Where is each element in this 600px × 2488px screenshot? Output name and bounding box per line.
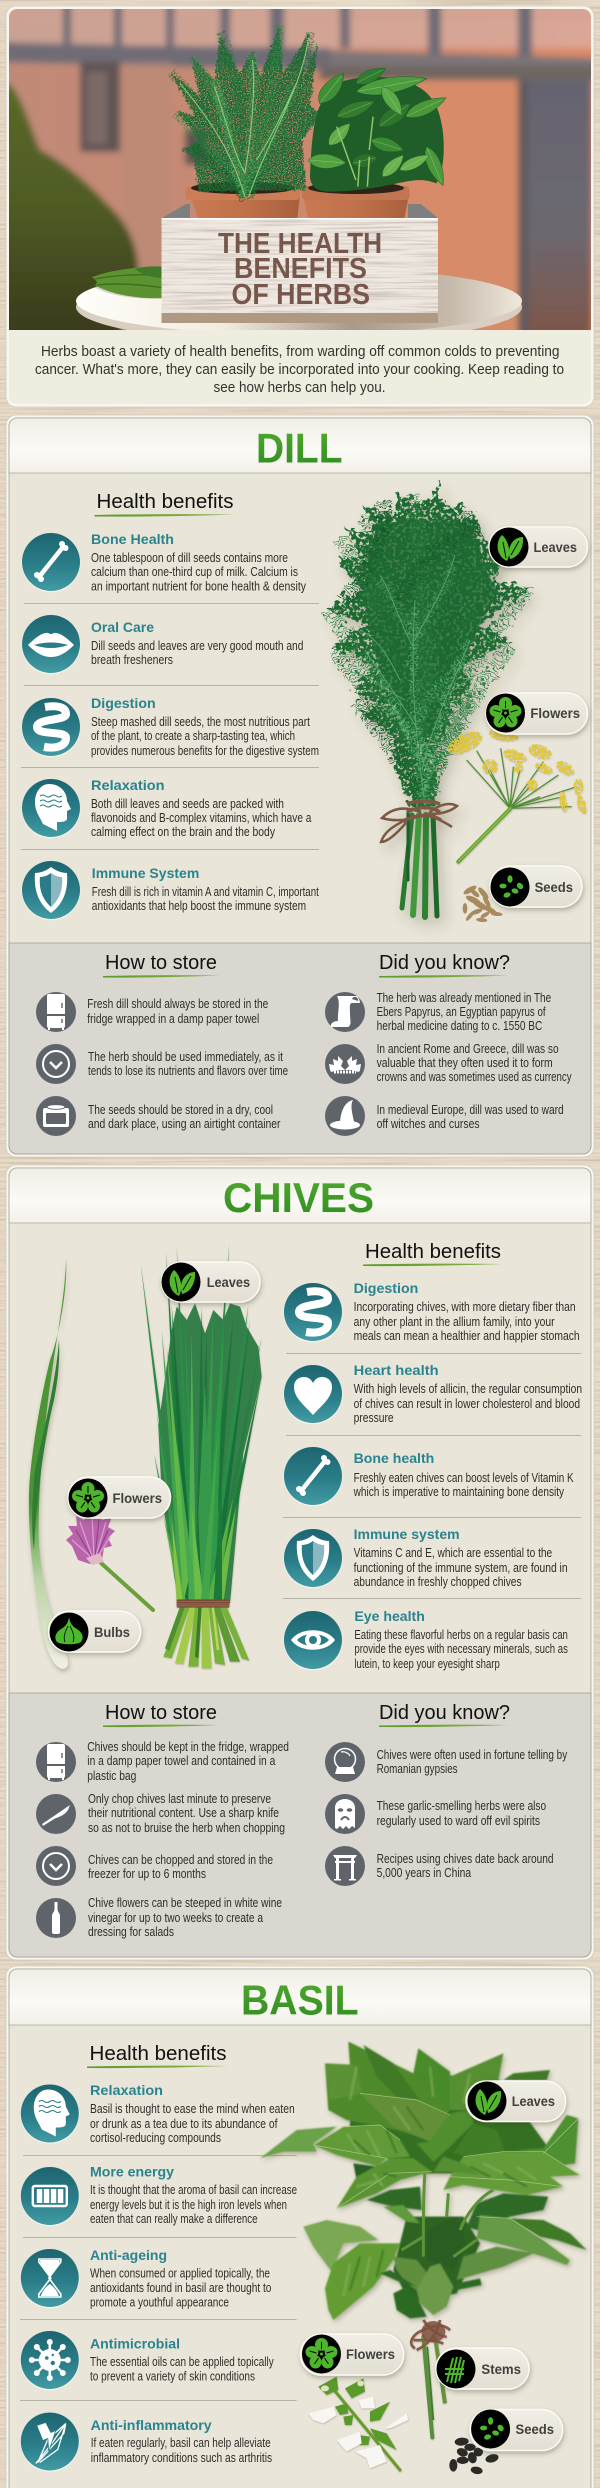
single chive stalk illustration (29, 1258, 68, 1669)
label: Flowers: Flowers (530, 706, 580, 721)
benefit: Oral Care: breath fresheners (91, 653, 173, 667)
basil seeds illustration (449, 2437, 499, 2475)
benefit: Eye health: Eye health (354, 1608, 425, 1624)
benefit: Immune System: Fresh dill is rich in vitamin A and vitamin C, important (92, 885, 319, 899)
section: chives (6, 1165, 594, 1960)
benefit: Anti-inflammatory (20, 2412, 272, 2472)
fact: witches: off witches and curses (377, 1117, 480, 1131)
benefit: Heart health (284, 1362, 582, 1425)
benefit: Bone Health (22, 531, 307, 594)
benefit: Digestion (284, 1280, 580, 1343)
tip: knife: Only chop chives last minute to preserve (88, 1792, 271, 1806)
tip: bottle (36, 1896, 282, 1939)
panel: chives storage and facts (9, 1693, 591, 1957)
plant pots (186, 182, 410, 218)
benefit: Digestion: Digestion (91, 695, 156, 711)
fact: crowns (325, 1042, 572, 1084)
label: Bulbs: Bulbs (94, 1625, 130, 1640)
tip: clock (36, 1846, 273, 1886)
fact: ghost: regularly used to ward off evil spirits (377, 1814, 540, 1828)
label: Stems: Stems (481, 2362, 521, 2377)
benefit: Relaxation: Relaxation (91, 777, 164, 793)
tip: clock: tends to lose its nutrients and flavors over time (88, 1064, 288, 1078)
benefit: Digestion: of the plant, to create a sharp-tasting tea, which (91, 729, 295, 743)
benefit: Oral Care: Oral Care (91, 619, 154, 635)
panel: dill storage and facts (9, 943, 591, 1154)
table (76, 266, 522, 330)
benefit: Relaxation: calming effect on the brain and the body (91, 825, 276, 839)
label: Leaves (489, 527, 588, 567)
dill seeds illustration (462, 884, 503, 922)
benefit: Bone health (284, 1447, 574, 1506)
tip: bottle: Chive flowers can be steeped in white wine (88, 1896, 282, 1910)
label: Leaves: Leaves (512, 2094, 555, 2109)
benefit: Digestion: Steep mashed dill seeds, the most nutritious part (91, 715, 310, 729)
benefit: Anti-inflammatory: If eaten regularly, basil can help alleviate (91, 2436, 271, 2450)
benefit: Antimicrobial (20, 2331, 274, 2390)
tip: clock (36, 1044, 288, 1084)
label: Flowers: Flowers (112, 1491, 162, 1506)
basil flower sprig illustration (308, 2377, 408, 2470)
benefit: Immune System: antioxidants that help boost the immune system (92, 899, 306, 913)
dill header (9, 418, 591, 473)
basil header: BASIL (241, 1976, 359, 2024)
basil header (9, 1969, 591, 2025)
heading: Did you know?: Did you know? (379, 952, 510, 974)
label: Flowers (486, 693, 588, 734)
section: basil (6, 1966, 594, 2488)
benefit: Relaxation: cortisol-reducing compounds (90, 2131, 221, 2145)
benefit: Digestion: provides numerous benefits for the digestive system (91, 744, 319, 758)
benefit: Digestion: Digestion (354, 1280, 418, 1296)
fact: torii gate: Recipes using chives date back around (377, 1852, 554, 1866)
label: Leaves: Leaves (534, 540, 577, 555)
fact: crystal ball: Romanian gypsies (377, 1762, 458, 1776)
benefit: Bone health: Bone health (354, 1450, 434, 1466)
tip: clock: Chives can be chopped and stored in the (88, 1853, 273, 1867)
label: Flowers (68, 1477, 170, 1518)
tip: fridge: plastic bag (87, 1769, 136, 1783)
benefit: Bone Health: calcium than one-third cup of milk. Calcium is (91, 565, 298, 579)
benefit: More energy: energy levels but it is the high iron levels when (90, 2198, 287, 2212)
heading: Did you know?: Did you know? (379, 1702, 510, 1724)
intro text: see how herbs can help you. (214, 380, 386, 396)
label: Seeds: Seeds (516, 2422, 554, 2437)
basil stems and twine (411, 2320, 450, 2437)
benefit: More energy (20, 2164, 297, 2226)
benefit: More energy: It is thought that the aroma of basil can increase (90, 2183, 297, 2197)
tip: knife: their nutritional content. Use a sharp knife (88, 1806, 279, 1820)
tip: fridge: fridge wrapped in a damp paper towel (87, 1012, 259, 1026)
fact: torii gate (325, 1846, 554, 1886)
fact: papyrus (325, 991, 551, 1033)
label: Flowers: Flowers (346, 2347, 395, 2362)
dill header: DILL (256, 424, 342, 471)
benefit: Eye health (284, 1608, 568, 1671)
wooden box with title (162, 204, 438, 323)
benefit: Relaxation (20, 2082, 295, 2145)
fact: ghost (325, 1794, 546, 1834)
benefit: Bone Health: Bone Health (91, 531, 174, 547)
label: Stems (436, 2348, 529, 2389)
benefit: Eye health: lutein, to keep your eyesight sharp (354, 1657, 500, 1671)
wooden box with title: BENEFITS (234, 253, 367, 285)
benefit: Oral Care: Dill seeds and leaves are very good mouth and (91, 639, 303, 653)
fact: torii gate: 5,000 years in China (377, 1866, 471, 1880)
tip: container (36, 1096, 280, 1136)
benefit: Oral Care (22, 615, 303, 674)
tip: fridge (36, 992, 268, 1032)
benefit: Immune system: Vitamins C and E, which are essential to the (354, 1546, 552, 1560)
benefit: Immune system (284, 1526, 568, 1589)
label: Flowers (300, 2334, 404, 2375)
chive flower illustration (66, 1509, 153, 1610)
tip: knife (36, 1792, 285, 1835)
benefit: Digestion (22, 695, 319, 758)
heading: How to store: How to store (105, 952, 217, 974)
intro text: cancer. What's more, they can easily be incorporated into your cooking. Keep reading to (35, 362, 564, 378)
benefit: Immune system: abundance in freshly chopped chives (354, 1575, 522, 1589)
benefit: Anti-ageing: promote a youthful appearance (90, 2296, 229, 2310)
tip: fridge: in a damp paper towel and contained in a (87, 1754, 275, 1768)
benefit: Anti-ageing: Anti-ageing (90, 2247, 167, 2263)
label: Leaves: Leaves (207, 1275, 250, 1290)
fact: papyrus: The herb was already mentioned in The (377, 991, 551, 1005)
section: dill (6, 415, 594, 1157)
label: Leaves (162, 1262, 260, 1302)
tip: container: The seeds should be stored in a dry, cool (88, 1103, 273, 1117)
panel: intro card (0, 0, 600, 407)
dill heading: Health benefits: Health benefits (96, 491, 234, 513)
dill flower illustration (445, 727, 588, 862)
wooden box with title: OF HERBS (232, 279, 370, 311)
intro text (35, 344, 564, 396)
benefit: Heart health: pressure (354, 1411, 394, 1425)
fact: ghost: These garlic-smelling herbs were also (377, 1799, 546, 1813)
benefit: Antimicrobial: Antimicrobial (90, 2336, 180, 2352)
tip: clock: freezer for up to 6 months (88, 1867, 206, 1881)
fact: witches (325, 1096, 564, 1136)
tip: knife: so as not to bruise the herb when chopping (88, 1821, 285, 1835)
benefit: Bone Health: an important nutrient for bone health & density (91, 580, 307, 594)
wooden box with title: THE HEALTH (218, 228, 382, 260)
dill bunch illustration (325, 486, 531, 917)
rosemary and basil plants (170, 25, 450, 200)
hero illustration (0, 0, 600, 343)
benefit: Anti-ageing: antioxidants found in basil are thought to (90, 2281, 271, 2295)
benefit: Immune System: Immune System (92, 865, 199, 881)
benefit: Anti-ageing: When consumed or applied topically, the (90, 2266, 270, 2280)
benefit: Digestion: any other plant in the allium family, into your (354, 1315, 555, 1329)
fact: crystal ball (325, 1742, 568, 1782)
basil heading: Health benefits: Health benefits (90, 2043, 226, 2065)
chives heading: Health benefits: Health benefits (365, 1241, 501, 1263)
tip: fridge: Fresh dill should always be stored in the (87, 997, 268, 1011)
benefit: Bone Health: One tablespoon of dill seeds contains more (91, 551, 288, 565)
benefit: Anti-ageing (20, 2247, 271, 2310)
label: Leaves (466, 2081, 566, 2122)
chive bunch illustration (141, 1243, 262, 1668)
tip: fridge: Chives should be kept in the fridge, wrapped (87, 1740, 289, 1754)
benefit: Relaxation (22, 777, 311, 839)
basil plant illustration (260, 2042, 587, 2320)
benefit: Antimicrobial: The essential oils can be applied topically (90, 2355, 274, 2369)
chives header: CHIVES (223, 1174, 374, 1221)
fact: crowns: valuable that they often used it to form (377, 1056, 553, 1070)
heading: How to store: How to store (105, 1702, 217, 1724)
benefit: Relaxation: or drunk as a tea due to its abundance of (90, 2117, 278, 2131)
benefit: Relaxation: flavonoids and B-complex vitamins, which have a (91, 811, 311, 825)
fact: crowns: In ancient Rome and Greece, dill was so (377, 1042, 559, 1056)
chives header (9, 1168, 591, 1223)
benefit: Relaxation: Relaxation (90, 2082, 163, 2098)
benefit: Antimicrobial: to prevent a variety of skin conditions (90, 2370, 255, 2384)
benefit: More energy: More energy (90, 2164, 174, 2180)
label: Seeds: Seeds (535, 880, 573, 895)
fact: papyrus: herbal medicine dating to c. 1550 BC (377, 1019, 542, 1033)
tip: bottle: vinegar for up to two weeks to create a (88, 1911, 263, 1925)
tip: clock: The herb should be used immediately, as it (88, 1050, 283, 1064)
tip: container: and dark place, using an airtight container (88, 1117, 280, 1131)
benefit: Relaxation: Basil is thought to ease the mind when eaten (90, 2102, 295, 2116)
benefit: Relaxation: Both dill leaves and seeds are packed with (91, 797, 284, 811)
tip: bottle: dressing for salads (88, 1925, 174, 1939)
label: Seeds (490, 866, 582, 907)
benefit: More energy: eaten that can really make a difference (90, 2212, 258, 2226)
benefit: Heart health: Heart health (354, 1362, 439, 1378)
tip: fridge (36, 1740, 289, 1783)
fact: papyrus: Ebers Papyrus, an Egyptian papyrus of (377, 1005, 546, 1019)
label: Bulbs (49, 1611, 141, 1652)
benefit: Anti-inflammatory: Anti-inflammatory (91, 2417, 212, 2433)
benefit: Immune System (22, 861, 319, 920)
intro text: Herbs boast a variety of health benefits, from warding off common colds to preventing (41, 344, 560, 360)
benefit: Immune system: Immune system (354, 1526, 460, 1542)
benefit: Anti-inflammatory: inflammatory conditions such as arthritis (91, 2451, 272, 2465)
label: Seeds (470, 2410, 563, 2450)
